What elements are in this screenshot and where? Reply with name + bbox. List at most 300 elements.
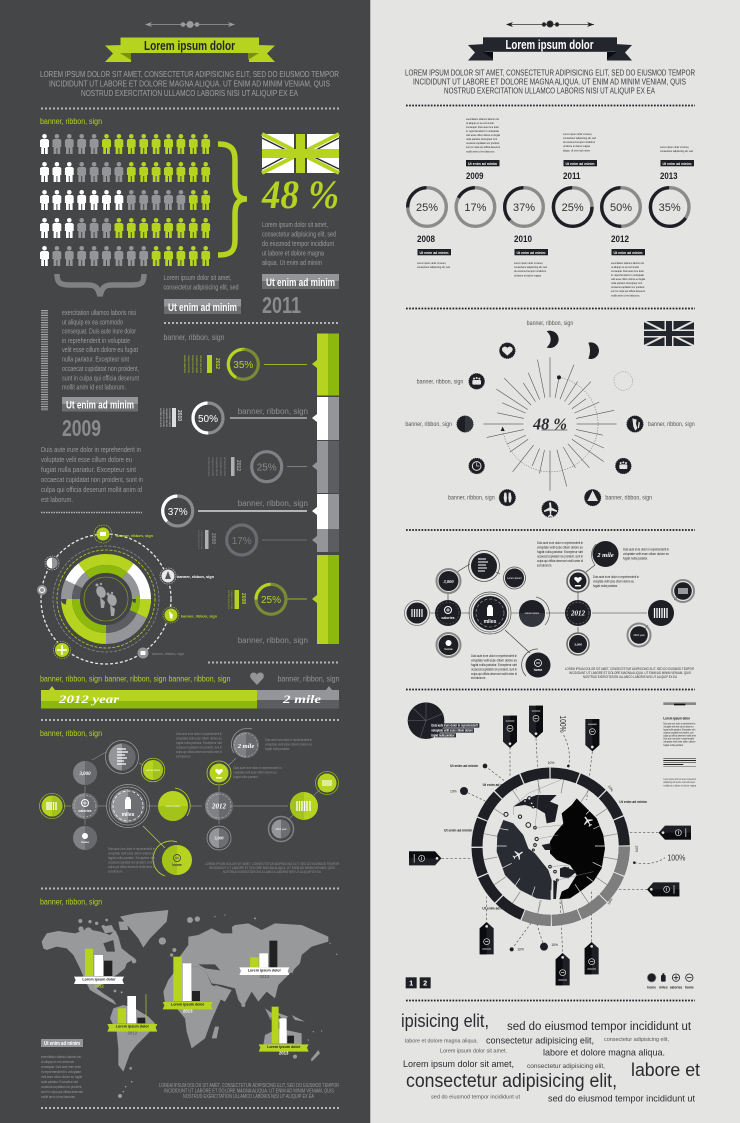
node: calories <box>435 600 461 626</box>
text block <box>623 548 669 560</box>
word cloud <box>401 1011 700 1104</box>
ring: 25% gray: 25% <box>257 462 277 474</box>
text block: 2009 upper: ut aliquip ex ea commodo <box>62 320 123 326</box>
text block: 2011: aliqua. Ut enim ad minim <box>563 148 590 152</box>
ring: 25% green: 25% <box>261 595 281 606</box>
tag: middle <box>164 299 241 314</box>
node: heart <box>207 761 231 785</box>
heading: map section: banner, ribbon, sign <box>40 898 102 906</box>
rotated caption: 2008 gray: 2008 <box>210 533 216 544</box>
small labels: Ut enim ad minim <box>619 800 647 804</box>
text block: 2012: sunt in culpa qui officia deserunt <box>611 289 645 293</box>
legend icons: miles <box>659 985 668 989</box>
numbered boxes <box>406 977 431 988</box>
map bar chart: Asia <box>239 941 289 979</box>
ring: 37% <box>163 496 193 526</box>
paragraph: LOREM IPSUM DOLOR SIT AMET, CONSECTETUR ADIPISICING ELIT, SED DO EIUSMOD TEMPOR <box>565 667 694 671</box>
ring: 35%: 35% <box>233 360 253 371</box>
panel: dark version <box>37 22 340 1108</box>
flow diagram <box>40 728 339 876</box>
text block: map: exercitation ullamco laboris nisi <box>41 1055 81 1059</box>
flag <box>262 134 339 173</box>
arrows <box>430 564 679 653</box>
intro paragraph: INCIDIDUNT UT LABORE ET DOLORE MAGNA ALIQUA. UT ENIM AD MINIM VENIAM, QUIS <box>49 80 330 88</box>
curly brace: gray <box>57 274 144 296</box>
node: small: Lorem ipsum <box>507 577 522 580</box>
text block: 2012: nulla pariatur. Excepteur sint <box>611 281 642 285</box>
word cloud: labore et dolore magna aliqua. <box>543 1048 665 1058</box>
text block: map: sunt in culpa qui officia deserunt <box>41 1090 83 1094</box>
small labels: Ut enim ad minim <box>483 783 510 787</box>
satellite labels: banner, ribbon, sign <box>181 614 218 618</box>
node: bottom 3000: 3,000 <box>573 642 582 646</box>
ring: 2013: 35% <box>659 202 681 214</box>
text block: culpa qui officia deserunt mollit anim id <box>108 865 155 869</box>
paragraph: NOSTRUD EXERCITATION ULLAMCO LABORIS NISI UT ALIQUIP EX EA <box>583 675 678 679</box>
rotated caption: 2010 white <box>159 408 182 427</box>
text block: fugiat nulla pariatur. Excepteur sint <box>108 856 155 860</box>
node: home: home <box>172 863 182 867</box>
rotated caption: 2008 gray: exercitation ullamco laboris <box>197 530 201 549</box>
heading: banner label: banner, ribbon, sign <box>40 117 102 126</box>
node: 2012 <box>565 600 591 626</box>
radial labels: banner, ribbon, sign <box>605 495 652 502</box>
rotated caption: 2012 gray: velit esse cillum dolore <box>223 457 227 476</box>
side text column: voluptate velit esse cillum dolore <box>663 739 696 743</box>
ring: 2008 <box>408 188 446 226</box>
year labels: 2009 <box>466 171 484 181</box>
globe: landmass left <box>497 820 552 900</box>
text block: occaecat cupidatat non proident, sunt in <box>471 668 517 672</box>
rotated caption: 2012 green: in reprehenderit voluptate <box>195 355 199 373</box>
text block: 2010: ut labore et dolore magna <box>514 274 541 278</box>
text block: 2012: mollit anim id est laborum. <box>611 294 640 298</box>
rotated caption: 2012 green: ut aliquip ex ea commodo <box>187 355 191 373</box>
paragraph: map: LOREM IPSUM DOLOR SIT AMET, CONSECTETUR ADIPISICING ELIT, SED DO EIUSMOD TEMPOR <box>159 1083 339 1089</box>
text block: 2009: occaecat cupidatat non proident, <box>466 141 500 145</box>
text block: 2009: nulla pariatur. Excepteur sint <box>466 137 497 141</box>
text block: 2009 lower: culpa qui officia deserunt mollit anim id <box>41 485 142 494</box>
small labels: 10% <box>635 845 639 852</box>
year labels: 2011 <box>563 171 580 181</box>
labels above year bar: banner, ribbon, sign <box>278 674 340 684</box>
map bar chart: North America: 2012 <box>94 983 104 988</box>
labels <box>238 407 308 645</box>
ring: 35% <box>228 349 258 379</box>
text block: voluptate velit esse cillum dolore eu <box>234 770 277 774</box>
text block: flag: consectetur adipisicing elit, sed <box>262 232 336 238</box>
text block <box>471 654 517 680</box>
connectors <box>198 364 307 599</box>
node: small green: Lorem ipsum <box>146 769 160 772</box>
vertical stacked bar <box>312 334 339 644</box>
big number: 48 %: 48 % <box>261 172 339 217</box>
panel: light version <box>401 21 700 1104</box>
year labels <box>417 171 678 244</box>
ring: 2010 <box>505 188 543 226</box>
text block: 2011: ut labore et dolore magna <box>563 144 590 148</box>
node: miles: miles <box>484 619 497 625</box>
ring: 2011 <box>553 188 592 226</box>
node: bottom 3000 <box>567 633 589 655</box>
word cloud: Lorem ipsum dolor sit amet, <box>403 1059 514 1070</box>
text block: Duis aute irure dolor in reprehenderit in <box>108 847 155 851</box>
ornament <box>145 22 235 28</box>
rotated caption: 2010 white: consequat duis aute irure <box>165 408 169 427</box>
text block <box>108 847 155 874</box>
side text column: adipisicing elit sed do eiusmod tempor <box>663 780 695 784</box>
pie chart <box>408 702 479 739</box>
text block <box>234 766 282 779</box>
text block: 2008: Lorem ipsum dolor sit amet, <box>417 261 446 265</box>
arrows <box>64 752 320 848</box>
text block: fugiat nulla pariatur. <box>234 775 259 779</box>
text block: 2009 <box>466 117 500 154</box>
text block: 2012: ut aliquip ex ea commodo <box>611 265 639 269</box>
text block: fugiat nulla pariatur. Excepteur sint <box>176 741 222 745</box>
text block: 2013: consectetur adipisicing elit, sed <box>660 149 693 153</box>
dotted empty circle <box>614 372 633 390</box>
globe: landmass right <box>550 798 605 899</box>
rotated caption: 2010 white: exercitation ullamco laboris <box>159 408 163 427</box>
black tags <box>418 160 694 255</box>
node: bottom: home <box>81 840 89 844</box>
labels above year bar: banner, ribbon, sign <box>40 674 102 684</box>
text block: occaecat cupidatat non proident, sunt in <box>176 746 222 750</box>
arc markers <box>501 375 561 431</box>
rotated caption: 2012 gray: 2012 <box>235 460 241 471</box>
text block: map: mollit anim id est laborum. <box>41 1095 76 1099</box>
text block: 2009 upper <box>62 310 139 392</box>
text block: occaecat cupidatat non proident, sunt in <box>108 860 155 864</box>
text block: 2010: consectetur adipisicing elit, sed <box>514 265 547 269</box>
text block: 2009 lower <box>41 445 143 504</box>
paragraph: INCIDIDUNT UT LABORE ET DOLORE MAGNA ALIQUA. UT ENIM AD MINIM VENIAM, QUIS <box>569 671 692 675</box>
tag: 2009: Ut enim ad minim <box>66 400 134 412</box>
node: heart <box>567 570 589 592</box>
node: bottom <box>73 826 97 850</box>
ring: 2013 <box>650 188 689 226</box>
black tags: Ut enim ad minim <box>516 250 546 255</box>
word cloud: sed do eiusmod tempor incididunt ut <box>431 1094 520 1100</box>
text block: map: in reprehenderit in voluptate <box>41 1070 81 1074</box>
labels: banner, ribbon, sign <box>238 636 308 645</box>
paragraph: INCIDIDUNT UT LABORE ET DOLORE MAGNA ALIQUA. UT ENIM AD MINIM VENIAM, QUIS <box>209 866 336 870</box>
year bar <box>41 686 339 708</box>
side text column: incididunt ut labore et dolore magna <box>663 783 696 787</box>
pie chart: Duis aute irure dolor in reprehenderit <box>431 724 479 728</box>
rotated caption: 2012 gray: exercitation ullamco laboris <box>207 457 211 476</box>
paragraph <box>565 667 694 679</box>
icon glyphs <box>465 347 640 517</box>
text block: 2009 lower: fugiat nulla pariatur. Excepteur sint <box>41 465 137 474</box>
node: small green <box>141 758 165 782</box>
rotated caption: 2010 white: ut aliquip ex ea commodo <box>162 408 166 427</box>
text block: 2009: sunt in culpa qui officia deserunt <box>466 145 500 149</box>
text block: 2009 lower: occaecat cupidatat non proident, sunt in <box>41 475 143 484</box>
map bar chart: South America: Lorem ipsum dolor <box>116 1025 149 1029</box>
ring: 2010: 37% <box>513 202 535 214</box>
node: dark centre <box>519 597 549 627</box>
text block: culpa qui officia deserunt mollit anim id <box>537 559 583 563</box>
text block: 2009: consequat. Duis aute irure dolor <box>466 125 499 129</box>
node: 3,000 <box>73 761 97 785</box>
text block: map <box>41 1055 83 1099</box>
text block: 2009: mollit anim id est laborum. <box>466 150 495 154</box>
text block: map: consequat. Duis aute irure dolor <box>41 1065 82 1069</box>
title ribbon: Lorem ipsum dolor <box>506 37 594 52</box>
ring: 2012 <box>602 188 640 226</box>
node: 2 mile: 2 mile <box>237 743 254 750</box>
text block: 2008: consectetur adipisicing elit, sed <box>417 265 450 269</box>
rotated caption: 2012 green: exercitation ullamco laboris <box>183 355 187 373</box>
side text column: occaecat cupidatat non proident, sunt <box>663 730 693 734</box>
tag: 2011 <box>262 274 339 289</box>
radial labels <box>405 320 695 502</box>
text block: Duis aute irure dolor in reprehenderit in <box>234 766 282 770</box>
radial chart <box>405 320 695 517</box>
node: home <box>522 649 550 678</box>
moons <box>547 331 599 359</box>
radial labels: banner, ribbon, sign <box>527 320 574 327</box>
text block: voluptate velit esse cillum dolore eu <box>265 742 312 746</box>
small labels: 10% <box>607 898 614 905</box>
text block: 2009: velit esse cillum dolore eu fugiat <box>466 133 500 137</box>
labels above year bar: banner, ribbon, sign <box>104 674 166 684</box>
pie chart: voluptate velit esse cillum dolore <box>431 729 473 733</box>
rotated caption: 2008 green: 2008 <box>240 593 246 604</box>
black tags: Ut enim ad minim <box>662 161 692 166</box>
text block: 2013: Lorem ipsum dolor sit amet, <box>660 145 689 149</box>
ring: 25% gray <box>252 452 282 482</box>
node: bottom 3000: 3,000 <box>214 836 224 840</box>
flow diagram: dark nodes <box>404 541 694 680</box>
text block: est laborum. <box>471 676 486 680</box>
small labels: Ut enim ad minim <box>482 907 510 911</box>
text block <box>176 732 222 758</box>
ring: 25% green <box>256 584 286 614</box>
ring: 17%: 17% <box>232 536 252 547</box>
word cloud: sed do eiusmod tempor incididunt ut <box>548 1094 695 1104</box>
centre value: 48 % <box>532 414 567 433</box>
rotated caption: 2012 green: velit esse cillum dolore <box>199 355 203 373</box>
map bar chart: Australia: 2013 <box>279 1051 289 1056</box>
node: 2012 year: 2012 year <box>633 634 645 637</box>
small labels: 10% <box>450 789 457 793</box>
rotated caption: 2008 gray: ut aliquip ex ea commodo <box>200 530 204 549</box>
node: 2 mile: 2 mile <box>596 552 614 559</box>
node: gray <box>268 816 294 842</box>
globe: tick marks <box>497 808 605 900</box>
ring: 2009 <box>456 188 495 226</box>
node: barcode small <box>316 772 338 794</box>
node: miles: miles <box>122 812 135 818</box>
donut: outer ring <box>66 560 146 638</box>
tag: 2011: Ut enim ad minim <box>266 277 335 289</box>
text block: culpa qui officia deserunt mollit anim id <box>176 750 222 754</box>
small labels: Ut enim ad minim <box>450 764 478 768</box>
tag: 2009 <box>62 397 138 412</box>
side text column: Duis aute irure dolor in reprehenderit in <box>663 721 696 725</box>
side text column: Lorem ipsum dolor <box>663 716 690 720</box>
map bar chart: Australia <box>259 1007 309 1056</box>
text block: 2009 lower: Duis aute irure dolor in reprehenderit in <box>41 445 141 454</box>
text block: Duis aute irure dolor in reprehenderit in <box>176 732 222 736</box>
label: banner, ribbon, sign <box>164 333 224 342</box>
labels: banner, ribbon, sign <box>238 407 308 416</box>
intro paragraph <box>40 70 339 98</box>
paragraph: map <box>159 1083 339 1100</box>
satellite labels: banner, ribbon, sign <box>177 574 215 579</box>
background: light panel <box>370 0 740 1123</box>
text block: Duis aute irure dolor in reprehenderit in <box>623 548 669 552</box>
text block: 2009 upper: sunt in culpa qui officia deserunt <box>62 376 139 382</box>
legend icons: home <box>647 985 656 989</box>
year bar: 2012 year <box>58 692 119 706</box>
labels above year bar: banner, ribbon, sign <box>168 674 230 684</box>
ring: 2008: 25% <box>416 202 438 214</box>
numbered boxes: 1 <box>409 978 413 987</box>
rotated caption: 2012 gray: in reprehenderit voluptate <box>219 457 223 476</box>
text block: map: occaecat cupidatat non proident, <box>41 1085 82 1089</box>
radial labels: banner, ribbon, sign <box>448 495 495 502</box>
intro paragraph: LOREM IPSUM DOLOR SIT AMET, CONSECTETUR ADIPISICING ELIT, SED DO EIUSMOD TEMPOR <box>40 70 339 79</box>
donut chart with satellites <box>37 525 218 664</box>
text block: fugiat nulla pariatur. <box>623 556 648 560</box>
text block: est laborum. <box>108 870 123 874</box>
pendant tags <box>409 706 691 985</box>
node: 3,000: 3,000 <box>442 579 454 584</box>
text block: flag: Lorem ipsum dolor sit amet, <box>262 222 328 229</box>
globe section <box>406 702 696 989</box>
legend icons: home <box>685 985 694 989</box>
intro paragraph <box>405 68 695 96</box>
map bar chart: South America <box>107 994 157 1036</box>
text block: 2009 upper: velit esse cillum dolore eu fugiat <box>62 347 138 354</box>
text block: 2009 upper: exercitation ullamco laboris nisi <box>62 310 136 317</box>
text block: fugiat nulla pariatur. <box>265 747 290 751</box>
text block: 2009 lower: voluptate velit esse cillum dolore eu <box>41 455 132 464</box>
satellite icons <box>37 525 179 658</box>
rotated caption: 2012 gray: ut aliquip ex ea commodo <box>211 457 215 476</box>
text block: 2012: velit esse cillum dolore eu fugiat <box>611 277 645 281</box>
text block: occaecat cupidatat non proident, sunt in <box>537 554 583 558</box>
node: 2 mile <box>231 728 259 758</box>
node: bottom 3000 <box>207 826 231 850</box>
rotated caption: 2012 gray <box>207 457 241 476</box>
text block: Duis aute irure dolor in reprehenderit in <box>265 738 312 742</box>
text block: Duis aute irure dolor in reprehenderit in <box>471 654 517 658</box>
text block: 2012: exercitation ullamco laboris nisi <box>611 261 644 265</box>
rotated caption: 2008 gray <box>197 530 216 549</box>
legend icons: calories <box>670 985 682 989</box>
text block: 2009 upper: occaecat cupidatat non proident, <box>62 366 139 373</box>
text block: 2009 upper: nulla pariatur. Excepteur sint <box>62 356 129 364</box>
side text column: voluptate velit esse cillum dolore eu <box>663 724 694 728</box>
rotated caption: 2008 green: exercitation ullamco laboris <box>227 590 231 609</box>
chart: yearly progress rings <box>408 117 694 298</box>
text block: 2011 <box>563 132 596 152</box>
text block <box>265 738 312 751</box>
text block: est laborum. <box>537 564 552 568</box>
paragraph: LOREM IPSUM DOLOR SIT AMET, CONSECTETUR ADIPISICING ELIT, SED DO EIUSMOD TEMPOR <box>205 862 339 866</box>
map bar chart: South America: 2012 <box>128 1031 138 1036</box>
ring: 50%: 50% <box>198 414 218 425</box>
node: calories: calories <box>441 616 455 620</box>
panel: timeline bars <box>159 333 339 645</box>
ring: 50% <box>193 403 223 433</box>
side text column: fugiat nulla pariatur. Excepteur sint <box>663 727 695 731</box>
text block: fugiat nulla pariatur. <box>593 584 618 588</box>
sunburst rays <box>483 357 617 491</box>
node: document <box>468 550 500 582</box>
side text column: Duis aute irure dolor in reprehenderit <box>663 736 694 740</box>
text block: 2010 <box>514 261 547 278</box>
satellite labels: banner, ribbon, sign <box>116 533 154 538</box>
title ribbon <box>468 37 632 60</box>
rotated caption: 2010 white: 2010 <box>176 410 182 421</box>
legend icons <box>647 973 694 989</box>
node: 2012: 2012 <box>211 802 226 810</box>
node: green centre: Lorem ipsum <box>166 805 180 808</box>
numbered boxes: 2 <box>423 978 427 987</box>
year: 2009: 2009 <box>62 415 101 441</box>
paragraph: NOSTRUD EXERCITATION ULLAMCO LABORIS NISI UT ALIQUIP EX EA <box>223 870 321 874</box>
node: calories <box>72 793 98 819</box>
map bar chart: Africa: Lorem ipsum dolor <box>171 1003 205 1007</box>
dots <box>460 764 636 951</box>
rotated caption: 2010 white: in reprehenderit voluptate <box>168 408 172 427</box>
text block: map: velit esse cillum dolore eu fugiat <box>41 1075 82 1079</box>
year labels: 2010 <box>514 234 532 244</box>
icon badges <box>457 343 643 517</box>
text block: voluptate velit esse cillum dolore eu <box>537 546 583 550</box>
node: small <box>504 567 526 589</box>
text block <box>537 541 583 568</box>
map bar chart: North America: Lorem ipsum dolor <box>82 978 116 982</box>
word cloud: consectetur adipisicing elit, <box>527 1063 605 1070</box>
icon: heart <box>250 672 264 685</box>
text block: 2009 upper: mollit anim id est laborum. <box>62 384 126 392</box>
black tags: Ut enim ad minim <box>468 161 497 166</box>
rotated caption: 2012 green: consequat duis aute irure <box>191 355 195 373</box>
text block <box>593 575 639 588</box>
node: bottom <box>436 633 460 657</box>
text block: middle: consectetur adipisicing elit, sed <box>164 284 239 292</box>
ring: 2009: 17% <box>464 202 487 214</box>
text block: culpa qui officia deserunt mollit anim id <box>471 672 517 676</box>
zigzag strip <box>41 310 48 411</box>
text block: 2012: in reprehenderit in voluptate <box>611 273 644 277</box>
node: home: home <box>534 668 542 672</box>
text block: map: nulla pariatur. Excepteur sint <box>41 1080 78 1084</box>
ring: 2011: 25% <box>562 202 584 214</box>
small labels: 10% <box>607 784 614 792</box>
ring segments: gray <box>477 773 624 920</box>
heading: flow section: banner, ribbon, sign <box>40 729 102 738</box>
node: green centre <box>158 788 190 821</box>
donut: inner ring <box>76 569 136 629</box>
map bar chart: Africa: 2013 <box>183 1009 193 1014</box>
side text column <box>663 702 696 787</box>
text block: 2009: ut aliquip ex ea commodo <box>466 121 494 125</box>
word cloud: consectetur adipisicing elit, <box>486 1036 594 1046</box>
rotated caption: 2008 green <box>227 590 246 609</box>
tag: map: Ut enim ad minim <box>44 1041 80 1047</box>
text block: 2009 upper: in reprehenderit in voluptate <box>62 338 130 345</box>
text block: 2009: exercitation ullamco laboris nisi <box>466 117 499 121</box>
node: miles <box>106 784 150 828</box>
